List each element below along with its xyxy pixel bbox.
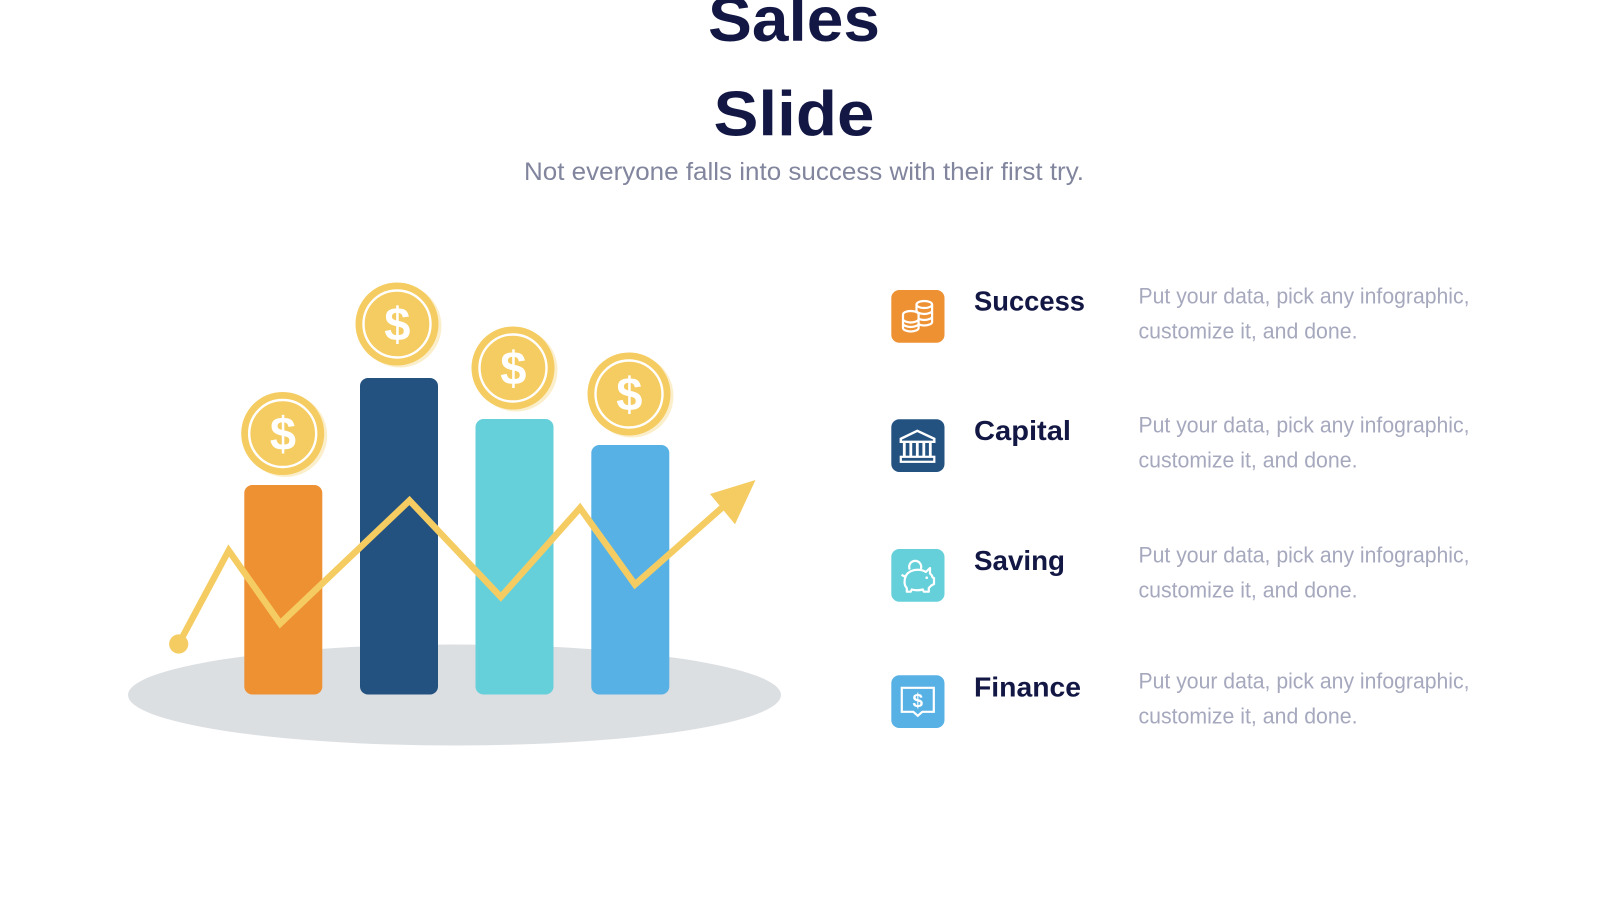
- row: Capital: [891, 412, 1470, 472]
- description: Capital: [1138, 412, 1470, 472]
- heading: Capital: Capital: [974, 415, 1071, 446]
- description: Saving: Put your data, pick any infographic,: [1138, 542, 1470, 568]
- description: Saving: [1138, 542, 1470, 602]
- heading: Finance: Finance: [974, 672, 1081, 702]
- description: Success: Put your data, pick any infographic,: [1138, 283, 1470, 308]
- heading: Saving: Saving: [974, 545, 1065, 576]
- coin above teal bar: $: [500, 342, 526, 394]
- description: Finance: customize it, and done.: [1138, 704, 1358, 728]
- coin above blue bar: $: [616, 368, 642, 420]
- trend line arrow: [169, 480, 756, 654]
- coin above orange bar: [241, 392, 327, 477]
- icon: bank building: [891, 419, 944, 472]
- title: Slide: [714, 80, 874, 150]
- coin above navy bar: $: [384, 298, 410, 350]
- ground shadow ellipse: [128, 644, 781, 746]
- coin above orange bar: $: [270, 407, 296, 460]
- coin above teal bar: [472, 326, 558, 412]
- icon: piggy bank: [891, 549, 944, 602]
- description: Saving: customize it, and done.: [1138, 578, 1358, 602]
- icon: dollar speech bubble: $: [913, 691, 924, 712]
- coin above navy bar: [356, 282, 442, 368]
- row: Saving: [891, 542, 1470, 602]
- description: Success: customize it, and done.: [1138, 318, 1358, 343]
- subtitle: Not everyone falls into success with their first try.: [524, 158, 1084, 186]
- bar: teal: [476, 419, 554, 694]
- icon: coin stacks: [891, 290, 944, 343]
- description: Capital: customize it, and done.: [1138, 447, 1358, 472]
- coin above blue bar: [588, 352, 674, 438]
- description: Finance: Put your data, pick any infographic,: [1138, 668, 1470, 694]
- heading: Success: Success: [974, 286, 1085, 317]
- bar: navy: [360, 378, 438, 694]
- row: Success: [891, 283, 1470, 343]
- row: Finance: [891, 668, 1470, 728]
- description: Success: [1138, 283, 1470, 343]
- title: [708, 0, 880, 150]
- bar chart illustration: [128, 282, 781, 746]
- description: Capital: Put your data, pick any infographic,: [1138, 412, 1470, 437]
- description: Finance: [1138, 668, 1470, 728]
- bar: orange: [244, 485, 322, 694]
- icon: dollar speech bubble: [891, 675, 944, 728]
- bar: blue: [591, 445, 669, 694]
